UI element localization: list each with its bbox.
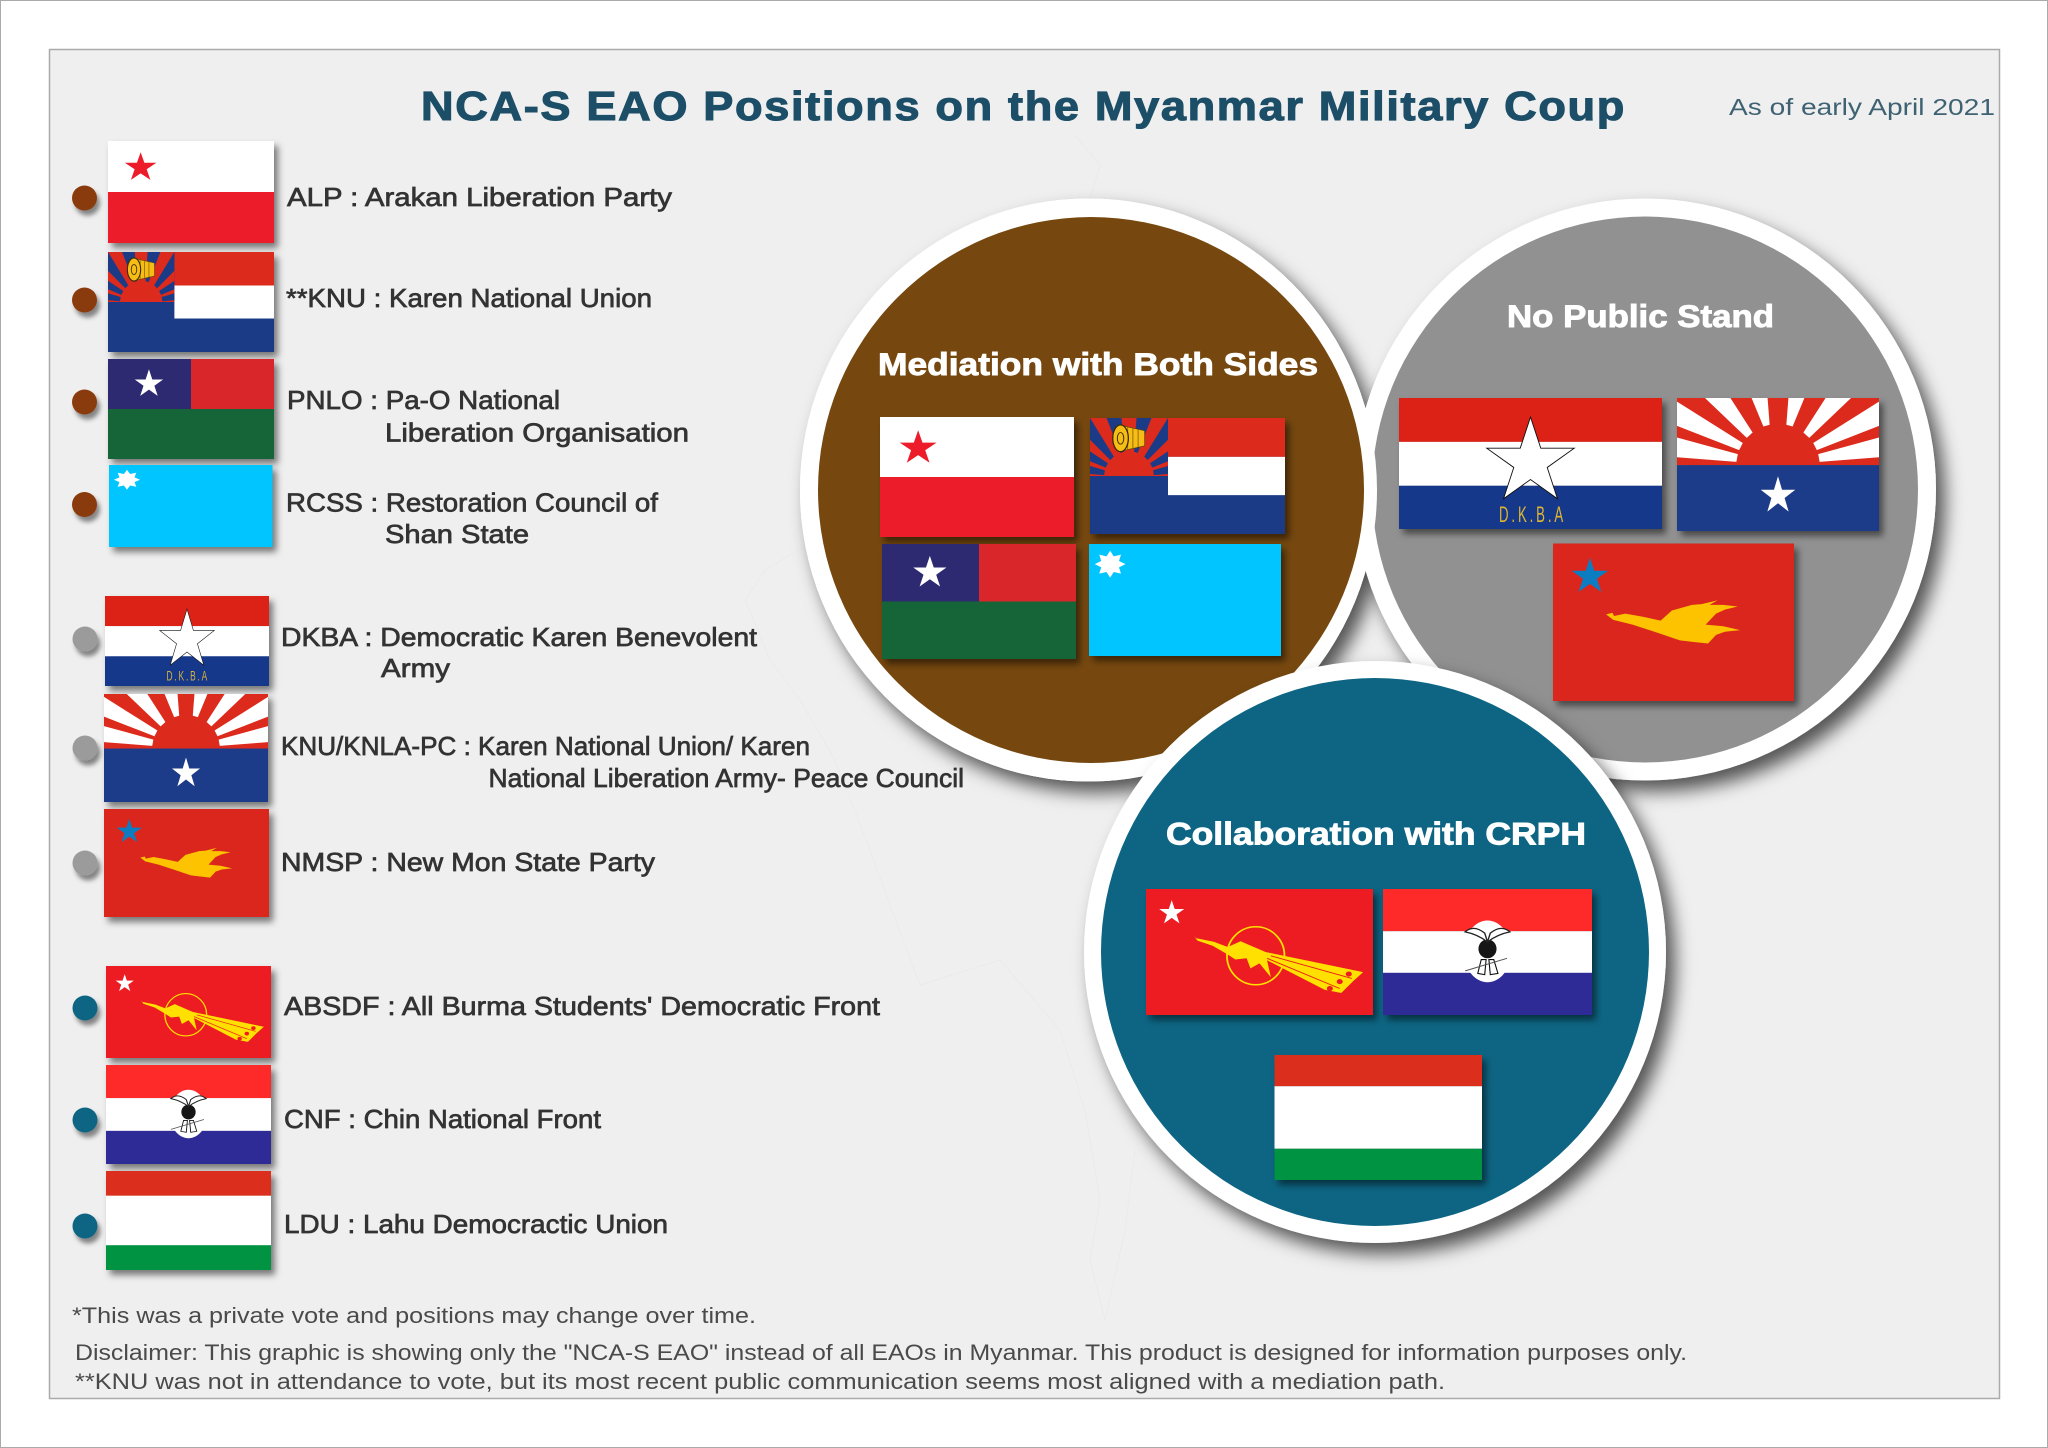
label: PNLO: [287, 385, 689, 448]
date note: As of early April 2021: [1729, 94, 1995, 120]
legend group: collaboration: [72, 966, 881, 1270]
flag: NMSP: [104, 809, 269, 917]
flag: PNLO: [882, 544, 1076, 659]
label: KNU: **KNU : Karen National Union: [286, 283, 652, 313]
dot: ALP: [72, 186, 97, 210]
flag: DKBA: D.K.B.A: [166, 670, 208, 684]
label: PNLO: Liberation Organisation: [385, 418, 689, 448]
footnote: private vote: *This was a private vote and positions may change over time.: [72, 1303, 756, 1328]
dot: KNU: [72, 288, 97, 312]
label: ALP: ALP : Arakan Liberation Party: [287, 182, 672, 212]
dot: LDU: [72, 1214, 98, 1238]
flag: RCSS: [109, 465, 272, 547]
flag: KNU: [73, 246, 274, 352]
dot: PNLO: [72, 390, 97, 414]
flag: ALP: [880, 417, 1074, 537]
flag: PNLO: [108, 359, 274, 459]
label: RCSS: [286, 488, 659, 549]
heading: mediation with both sides: Mediation with Both Sides: [878, 346, 1318, 382]
legend group: no public stand: [72, 596, 964, 917]
label: ABSDF: ABSDF : All Burma Students' Democratic Front: [284, 991, 881, 1021]
dot: KNU/KNLA-PC: [72, 736, 98, 760]
label: RCSS: RCSS : Restoration Council of: [286, 488, 659, 518]
circle: brown: [800, 198, 1377, 782]
label: DKBA: Army: [381, 653, 450, 683]
flag: ALP: [108, 141, 274, 243]
footnote: KNU attendance: **KNU was not in attendance to vote, but its most recent public communication seems most aligned with a mediation path.: [75, 1369, 1445, 1394]
label: RCSS: Shan State: [385, 519, 529, 549]
dot: CNF: [72, 1108, 98, 1132]
flag: DKBA: [1399, 398, 1662, 529]
dot: DKBA: [72, 626, 98, 652]
shadow cast by mediation circle: [800, 198, 1377, 782]
circle: grey: [1354, 198, 1936, 780]
flag: RCSS: [1089, 544, 1281, 656]
title: NCA-S EAO Positions on the Myanmar Military Coup: [421, 83, 1626, 129]
label: LDU: LDU : Lahu Democractic Union: [284, 1209, 668, 1239]
flag: NMSP: [1553, 544, 1794, 701]
dot: NMSP: [72, 850, 98, 876]
dot: ABSDF: [72, 996, 98, 1020]
flag: LDU: [106, 1171, 271, 1270]
panel: collaboration circle: [1084, 661, 1666, 1243]
flag: CNF: [1383, 889, 1592, 1015]
label: KNU/KNLA-PC: KNU/KNLA-PC : Karen National Union/ Karen: [281, 731, 810, 761]
label: KNU/KNLA-PC: National Liberation Army- Peace Council: [488, 763, 964, 793]
flag: DKBA: D.K.B.A: [1499, 503, 1564, 527]
flag: DKBA: [105, 596, 269, 686]
heading: no public stand: No Public Stand: [1507, 298, 1774, 334]
label: PNLO: PNLO : Pa-O National: [287, 385, 560, 415]
footnote: disclaimer: Disclaimer: This graphic is showing only the "NCA-S EAO" instead of all EAOs in Myanmar. This product is designed for information purposes only.: [75, 1340, 1687, 1365]
dot: RCSS: [72, 492, 97, 517]
circle: teal: [1084, 661, 1666, 1243]
label: DKBA: [281, 622, 758, 683]
flag: CNF: [106, 1065, 271, 1164]
flag: KNU/KNLA-PC: [1644, 360, 1912, 531]
flag: KNU: [1049, 411, 1285, 534]
flag: ABSDF: [1146, 889, 1373, 1015]
flag: LDU: [1274, 1055, 1482, 1180]
panel: mediation circle: [800, 198, 1377, 782]
label: KNU/KNLA-PC: [281, 731, 964, 793]
panel: no public stand circle: [1354, 198, 1936, 780]
flag: KNU/KNLA-PC: [77, 663, 295, 802]
faint map of Myanmar in background: [745, 135, 1135, 1320]
label: NMSP: NMSP : New Mon State Party: [281, 847, 655, 877]
label: DKBA: DKBA : Democratic Karen Benevolent: [281, 622, 758, 652]
flag: ABSDF: [106, 966, 271, 1058]
legend group: mediation: [72, 141, 689, 549]
heading: collaboration with CRPH: Collaboration with CRPH: [1166, 816, 1586, 852]
label: CNF: CNF : Chin National Front: [284, 1104, 602, 1134]
